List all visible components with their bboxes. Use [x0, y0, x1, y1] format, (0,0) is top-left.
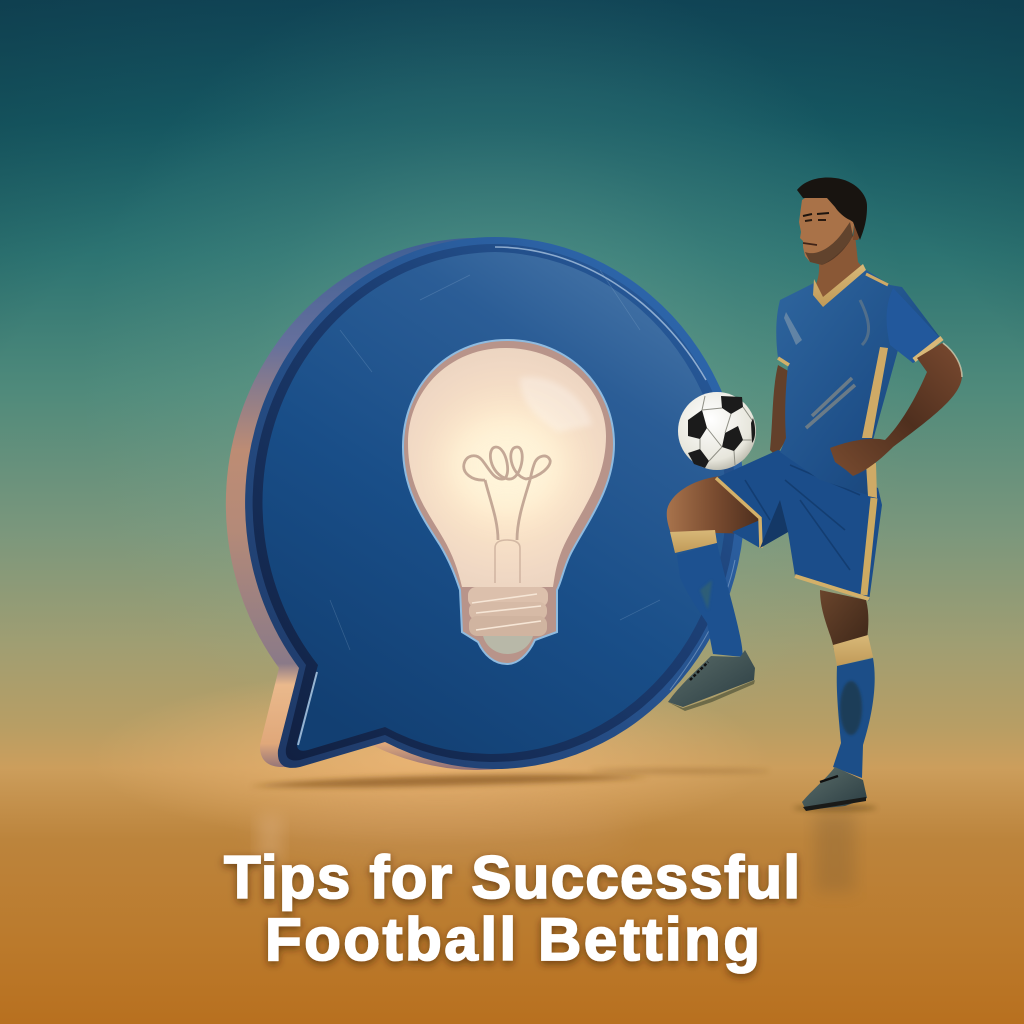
head [799, 188, 858, 265]
raised thigh [667, 476, 762, 534]
jersey collar [813, 264, 866, 307]
light bulb [403, 340, 614, 664]
standing sock band [833, 635, 873, 666]
raised sock [677, 543, 743, 657]
football player [667, 178, 962, 811]
standing sock [833, 658, 875, 778]
floor shadow and reflections [250, 768, 877, 892]
title [224, 844, 800, 973]
bulb glass recess [403, 340, 614, 664]
standing boot [802, 767, 867, 810]
filament [464, 447, 550, 583]
bubble copper rim [226, 238, 728, 770]
bulb glass [408, 348, 606, 587]
raised sock band [670, 530, 717, 553]
hair [797, 178, 867, 240]
bubble front face [245, 237, 745, 769]
title: Tips for Successful [224, 844, 800, 911]
bulb screw base [468, 587, 548, 654]
near arm and hand [830, 343, 962, 476]
far arm [770, 365, 790, 456]
jersey [776, 268, 942, 498]
soccer ball [678, 392, 756, 470]
title: Football Betting [265, 906, 760, 973]
neck [816, 235, 863, 299]
standing leg [820, 590, 868, 650]
shorts [716, 450, 882, 601]
speech bubble with light bulb [226, 237, 745, 770]
raised boot [668, 650, 755, 707]
